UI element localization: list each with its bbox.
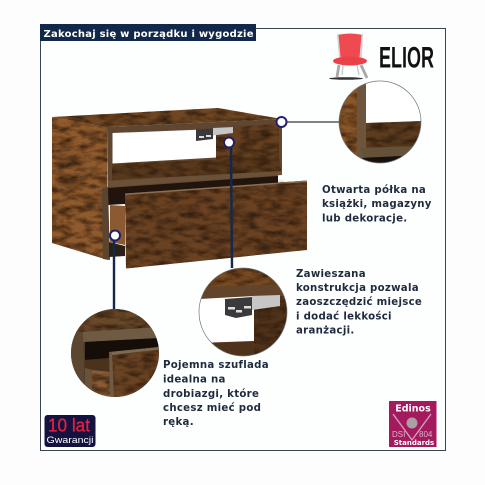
text: drawer: Pojemna szuflada (163, 360, 269, 371)
detail circle: open shelf (339, 81, 421, 163)
logo: Elior wordmark: ELIOR (379, 42, 434, 74)
arrow: drawer connector (110, 230, 120, 310)
drawer front (125, 180, 307, 268)
panel: page frame (40, 28, 446, 450)
badge: Edinos Standards: Edinos (395, 404, 431, 414)
logo: Elior chair (329, 34, 367, 80)
wall bracket on cabinet (196, 127, 233, 141)
badge: Edinos Standards: 804 (419, 430, 433, 439)
wood knots (58, 144, 285, 249)
drawer cavity (108, 176, 278, 205)
text: hanging construction: i dodać lekkości (296, 310, 392, 322)
badge: 10 years warranty (44, 415, 96, 447)
shelf front edge (108, 171, 282, 187)
badge: Edinos Standards: Standards (394, 439, 434, 447)
cabinet inner frame (107, 119, 282, 190)
badge: Edinos Standards (389, 401, 436, 447)
text: hanging construction: Zawieszana (296, 269, 366, 280)
title banner (40, 24, 256, 41)
text: hanging construction: aranżacji. (296, 326, 355, 336)
text: drawer: chcesz mieć pod (163, 402, 261, 414)
text: drawer: idealna na (163, 374, 226, 386)
cabinet top panel (52, 108, 282, 127)
text: drawer: ręką. (163, 417, 194, 428)
detail circle: hanging bracket (199, 268, 287, 356)
text: hanging construction: zaoszczędzić miejsce (296, 296, 422, 308)
arrow: shelf connector (276, 117, 340, 127)
open shelf white gap (112, 129, 216, 164)
title banner: Zakochaj się w porządku i wygodzie (44, 29, 254, 40)
furniture: wall cabinet with drawer (52, 108, 307, 268)
shelf back right (216, 124, 279, 160)
badge: Edinos Standards: DSI (392, 430, 405, 439)
text: drawer: drobiazgi, które (163, 388, 259, 400)
arrow: bracket connector (224, 138, 234, 268)
text: hanging construction: konstrukcja pozwala (296, 283, 419, 294)
text: open shelf: książki, magazyny (322, 199, 432, 210)
shelf board (112, 157, 281, 180)
detail circle: drawer (71, 309, 159, 397)
badge: 10 years warranty: Gwarancji (46, 435, 94, 446)
badge: 10 years warranty: 10 lat (48, 416, 90, 436)
text: open shelf: lub dekoracje. (322, 214, 407, 224)
text: open shelf: Otwarta półka na (322, 184, 426, 196)
cabinet left side (52, 117, 108, 260)
